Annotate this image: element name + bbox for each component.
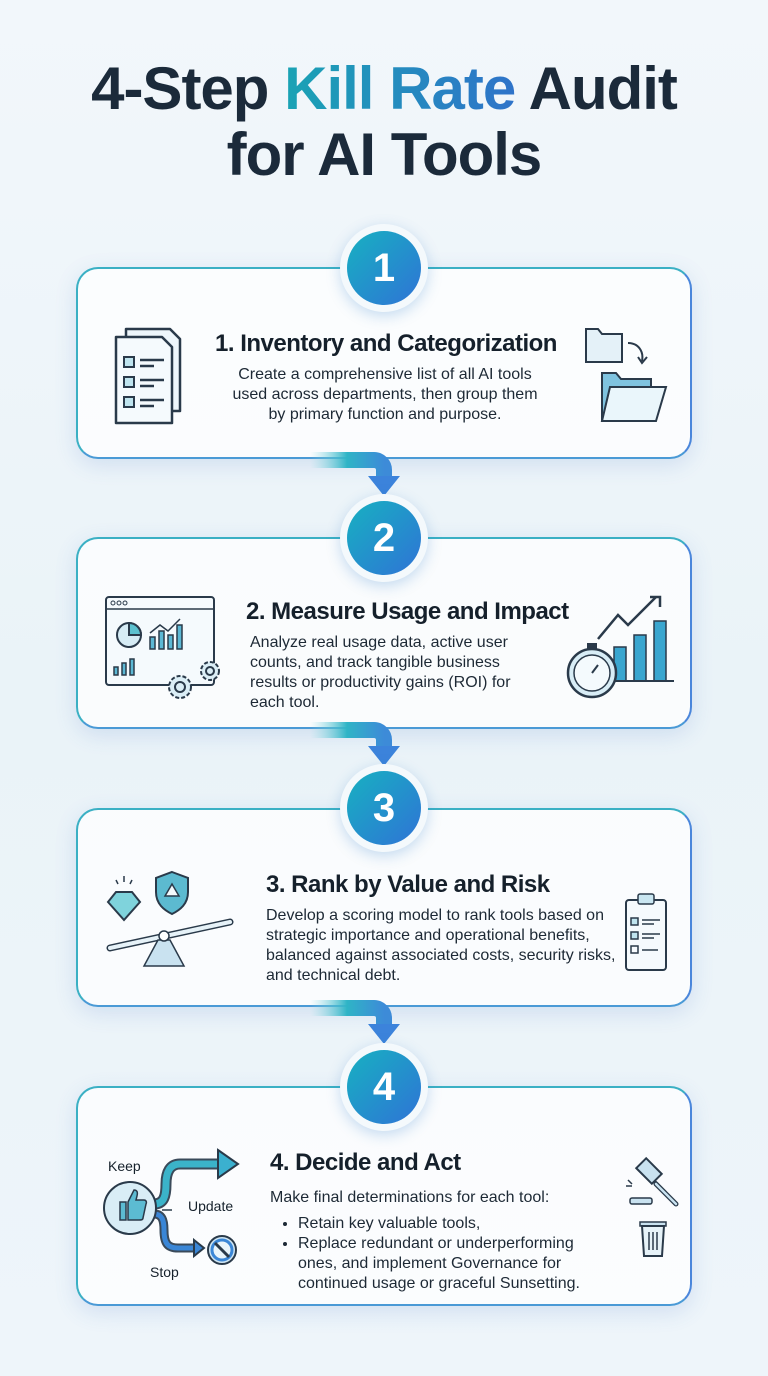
- badge 3: [340, 764, 428, 852]
- icon: gavel and trash: [626, 1156, 678, 1257]
- badge 3: 3: [373, 786, 395, 830]
- label: Keep: Keep: [108, 1158, 141, 1174]
- heading 2: 2. Measure Usage and Impact: [246, 598, 569, 625]
- text 1: Create a comprehensive list of all AI tools used across departments, then group them by primary function and purpose.: [232, 366, 538, 423]
- arrow 3 to 4: [312, 1000, 400, 1043]
- text 4: [270, 1189, 580, 1292]
- text 2: Analyze real usage data, active user counts, and track tangible business results or productivity gains (ROI) for each tool.: [250, 634, 511, 711]
- label: Stop: Stop: [150, 1264, 179, 1280]
- text 4: Retain key valuable tools,: [298, 1215, 480, 1232]
- badge 1: [340, 224, 428, 312]
- badge 4: [340, 1043, 428, 1131]
- panel: step 4: [76, 1086, 692, 1306]
- badge 2: [340, 494, 428, 582]
- label: Update: Update: [188, 1198, 233, 1214]
- panel: step 3: [76, 808, 692, 1007]
- icon: checklist documents: [114, 328, 182, 424]
- arrow 1 to 2: [312, 452, 400, 494]
- heading 4: 4. Decide and Act: [270, 1149, 461, 1176]
- icon: balance scale: [106, 870, 234, 967]
- panel: step 2: [76, 537, 692, 729]
- text 3: Develop a scoring model to rank tools based on strategic importance and operational benefits, balanced against associated costs, security risks, and technical debt.: [266, 907, 616, 984]
- text 4: Replace redundant or underperforming ones, and implement Governance for continued usage or graceful Sunsetting.: [298, 1235, 580, 1292]
- icon: decision flow: [103, 1148, 240, 1280]
- panel: step 1: [76, 267, 692, 459]
- heading 1: 1. Inventory and Categorization: [215, 330, 557, 357]
- icon: clipboard: [625, 893, 667, 971]
- heading 3: 3. Rank by Value and Risk: [266, 871, 550, 898]
- title: 4-Step Kill Rate Audit: [91, 55, 677, 122]
- icon: dashboard: [105, 596, 220, 699]
- icon: folders: [585, 328, 668, 422]
- arrow 2 to 3: [312, 722, 400, 764]
- icon: stopwatch and growth chart: [566, 596, 674, 698]
- text 4: Make final determinations for each tool:: [270, 1189, 549, 1206]
- badge 2: 2: [373, 516, 395, 560]
- title: for AI Tools: [227, 121, 541, 188]
- title: [91, 55, 678, 188]
- badge 4: 4: [373, 1065, 395, 1109]
- badge 1: 1: [373, 246, 395, 290]
